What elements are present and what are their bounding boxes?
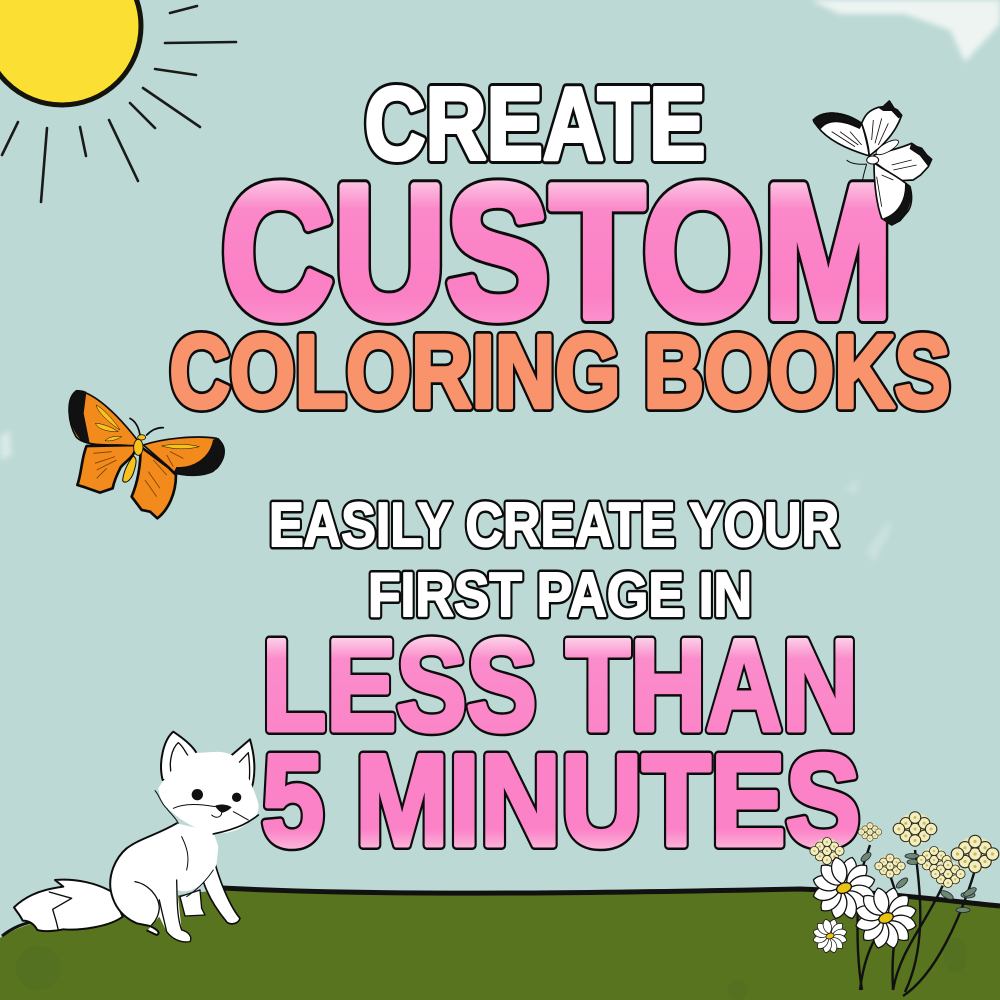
- heading: 5 minutes: 5 MINUTES: [262, 727, 860, 873]
- icon: sun: [0, 0, 236, 202]
- subtitle: First page in: FIRST PAGE IN: [368, 561, 752, 630]
- title: Create: CREATE: [364, 66, 706, 181]
- ground hill: [0, 888, 1000, 1000]
- daisies: [812, 856, 876, 920]
- icon: orange butterfly: [69, 391, 224, 518]
- yarrow clusters: [810, 838, 844, 864]
- flower stems: [857, 845, 975, 996]
- fox body: [110, 823, 218, 942]
- grass tufts: [16, 937, 967, 1000]
- heading: Less than: LESS THAN: [262, 612, 858, 758]
- fox far hind paw: [180, 890, 205, 916]
- flower leaves: [859, 851, 978, 912]
- fox front leg right: [203, 863, 240, 924]
- icon: white butterfly: [813, 101, 932, 225]
- subtitle: First page in: FIRST PAGE IN: [368, 561, 752, 630]
- heading: Less than: LESS THAN: [262, 612, 858, 758]
- icon: wildflowers: [810, 812, 999, 996]
- title: Create: CREATE: [364, 66, 706, 181]
- sun rays: [2, 6, 236, 202]
- fox head: [158, 752, 259, 834]
- fox tail: [14, 880, 123, 931]
- fox ears: [161, 732, 197, 780]
- subtitle: Easily create your: EASILY CREATE YOUR: [269, 491, 839, 560]
- subtitle: Easily create your: EASILY CREATE YOUR: [269, 491, 839, 560]
- heading: 5 minutes: 5 MINUTES: [262, 727, 860, 873]
- white brush patches: [0, 0, 1000, 562]
- icon: white fox: [14, 732, 259, 942]
